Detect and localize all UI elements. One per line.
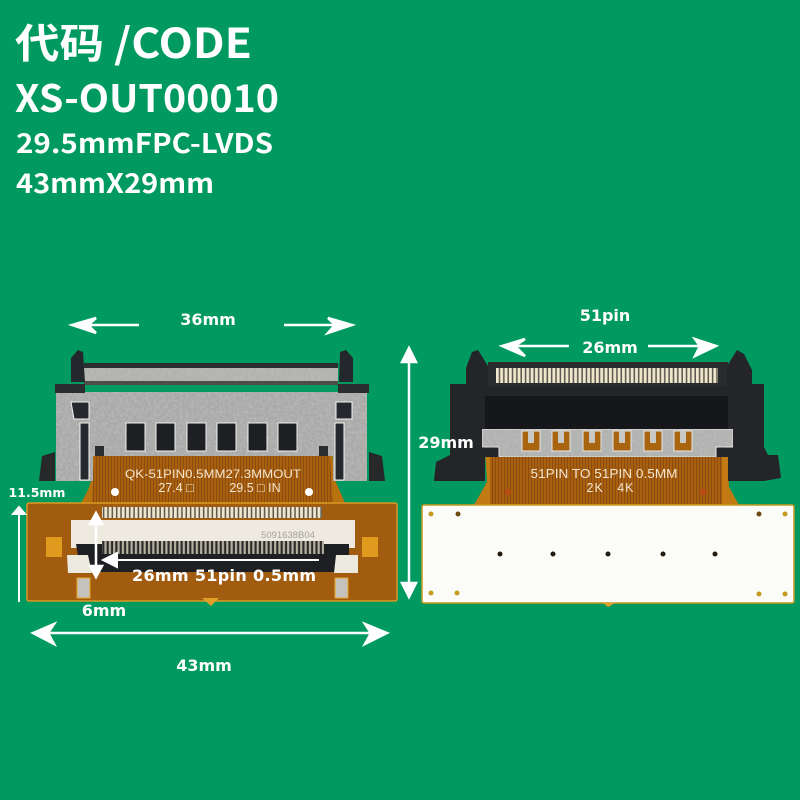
board holes — [428, 512, 788, 596]
gold pin row — [496, 368, 718, 383]
orange FPC ribbon — [80, 450, 346, 505]
ribbon label: 29.5 □ IN — [229, 481, 281, 495]
ribbon label: 2K 4K — [586, 481, 634, 495]
board stiffener squares — [46, 537, 378, 557]
top dark edge — [84, 363, 338, 368]
label: 36mm: 36mm — [180, 310, 236, 329]
ears — [466, 350, 752, 385]
arrow: 43mm — [33, 624, 387, 644]
orange FPC ribbon — [474, 450, 739, 505]
label: 11.5mm: 11.5mm — [9, 485, 65, 500]
connector black body — [434, 384, 781, 481]
label: 6mm: 6mm — [82, 601, 126, 620]
spec: FPC type: 29.5mmFPC-LVDS — [16, 122, 273, 161]
panel: left connector front view — [27, 350, 397, 606]
arrow: 26mm right — [648, 339, 716, 356]
dark tabs — [55, 384, 369, 393]
connector feet — [39, 452, 55, 481]
ribbon label: QK-51PIN0.5MM27.3MMOUT — [125, 467, 302, 481]
metal plate — [482, 429, 733, 457]
label: 26mm: 26mm — [582, 338, 638, 357]
label: 43mm: 43mm — [176, 656, 232, 675]
white stiffener board — [422, 505, 794, 603]
side latches — [71, 402, 352, 480]
connector dark slot — [76, 544, 349, 572]
arrow: 29mm vertical — [402, 348, 416, 597]
contact pins — [102, 541, 324, 554]
left ear — [71, 350, 85, 382]
right ear — [339, 350, 353, 382]
ribbon label — [111, 467, 313, 496]
connector white housing — [71, 520, 355, 548]
label: 29mm: 29mm — [418, 433, 474, 452]
plate window centres — [528, 431, 686, 443]
white corners — [67, 555, 358, 573]
arrow: 36mm right — [284, 318, 352, 333]
shield windows — [126, 423, 297, 451]
bottom tab — [603, 603, 615, 607]
ribbon label: 27.4 □ — [158, 481, 194, 495]
title: code heading: 代码 /CODE — [15, 10, 252, 70]
top black bar — [488, 362, 728, 386]
inner cover — [485, 396, 728, 429]
arrow: 11.5mm vertical — [13, 507, 25, 602]
arrow: 36mm left — [72, 318, 139, 333]
arrow: 26mm left — [502, 339, 569, 356]
label: 26mm 51pin 0.5mm: 26mm 51pin 0.5mm — [132, 566, 316, 585]
ribbon label: 51PIN TO 51PIN 0.5MM — [530, 467, 678, 481]
label: 51pin: 51pin — [580, 306, 630, 325]
arrow: 26mm horizontal on connector — [103, 553, 319, 567]
arrow: 6mm vertical — [90, 513, 102, 577]
spec: size: 43mmX29mm — [16, 162, 214, 201]
solder pin row — [102, 507, 322, 518]
solder pads — [77, 578, 348, 598]
product code: XS-OUT00010 — [15, 68, 279, 123]
top metal strip — [84, 368, 338, 381]
small latch hooks — [95, 446, 328, 456]
plate windows — [522, 431, 692, 451]
FPC board — [27, 503, 397, 601]
panel: right connector back view — [422, 350, 794, 607]
bottom tab — [202, 598, 219, 606]
metal shield — [56, 392, 367, 481]
connector part number: 5091638B04 — [261, 530, 315, 541]
ribbon label — [505, 467, 706, 495]
